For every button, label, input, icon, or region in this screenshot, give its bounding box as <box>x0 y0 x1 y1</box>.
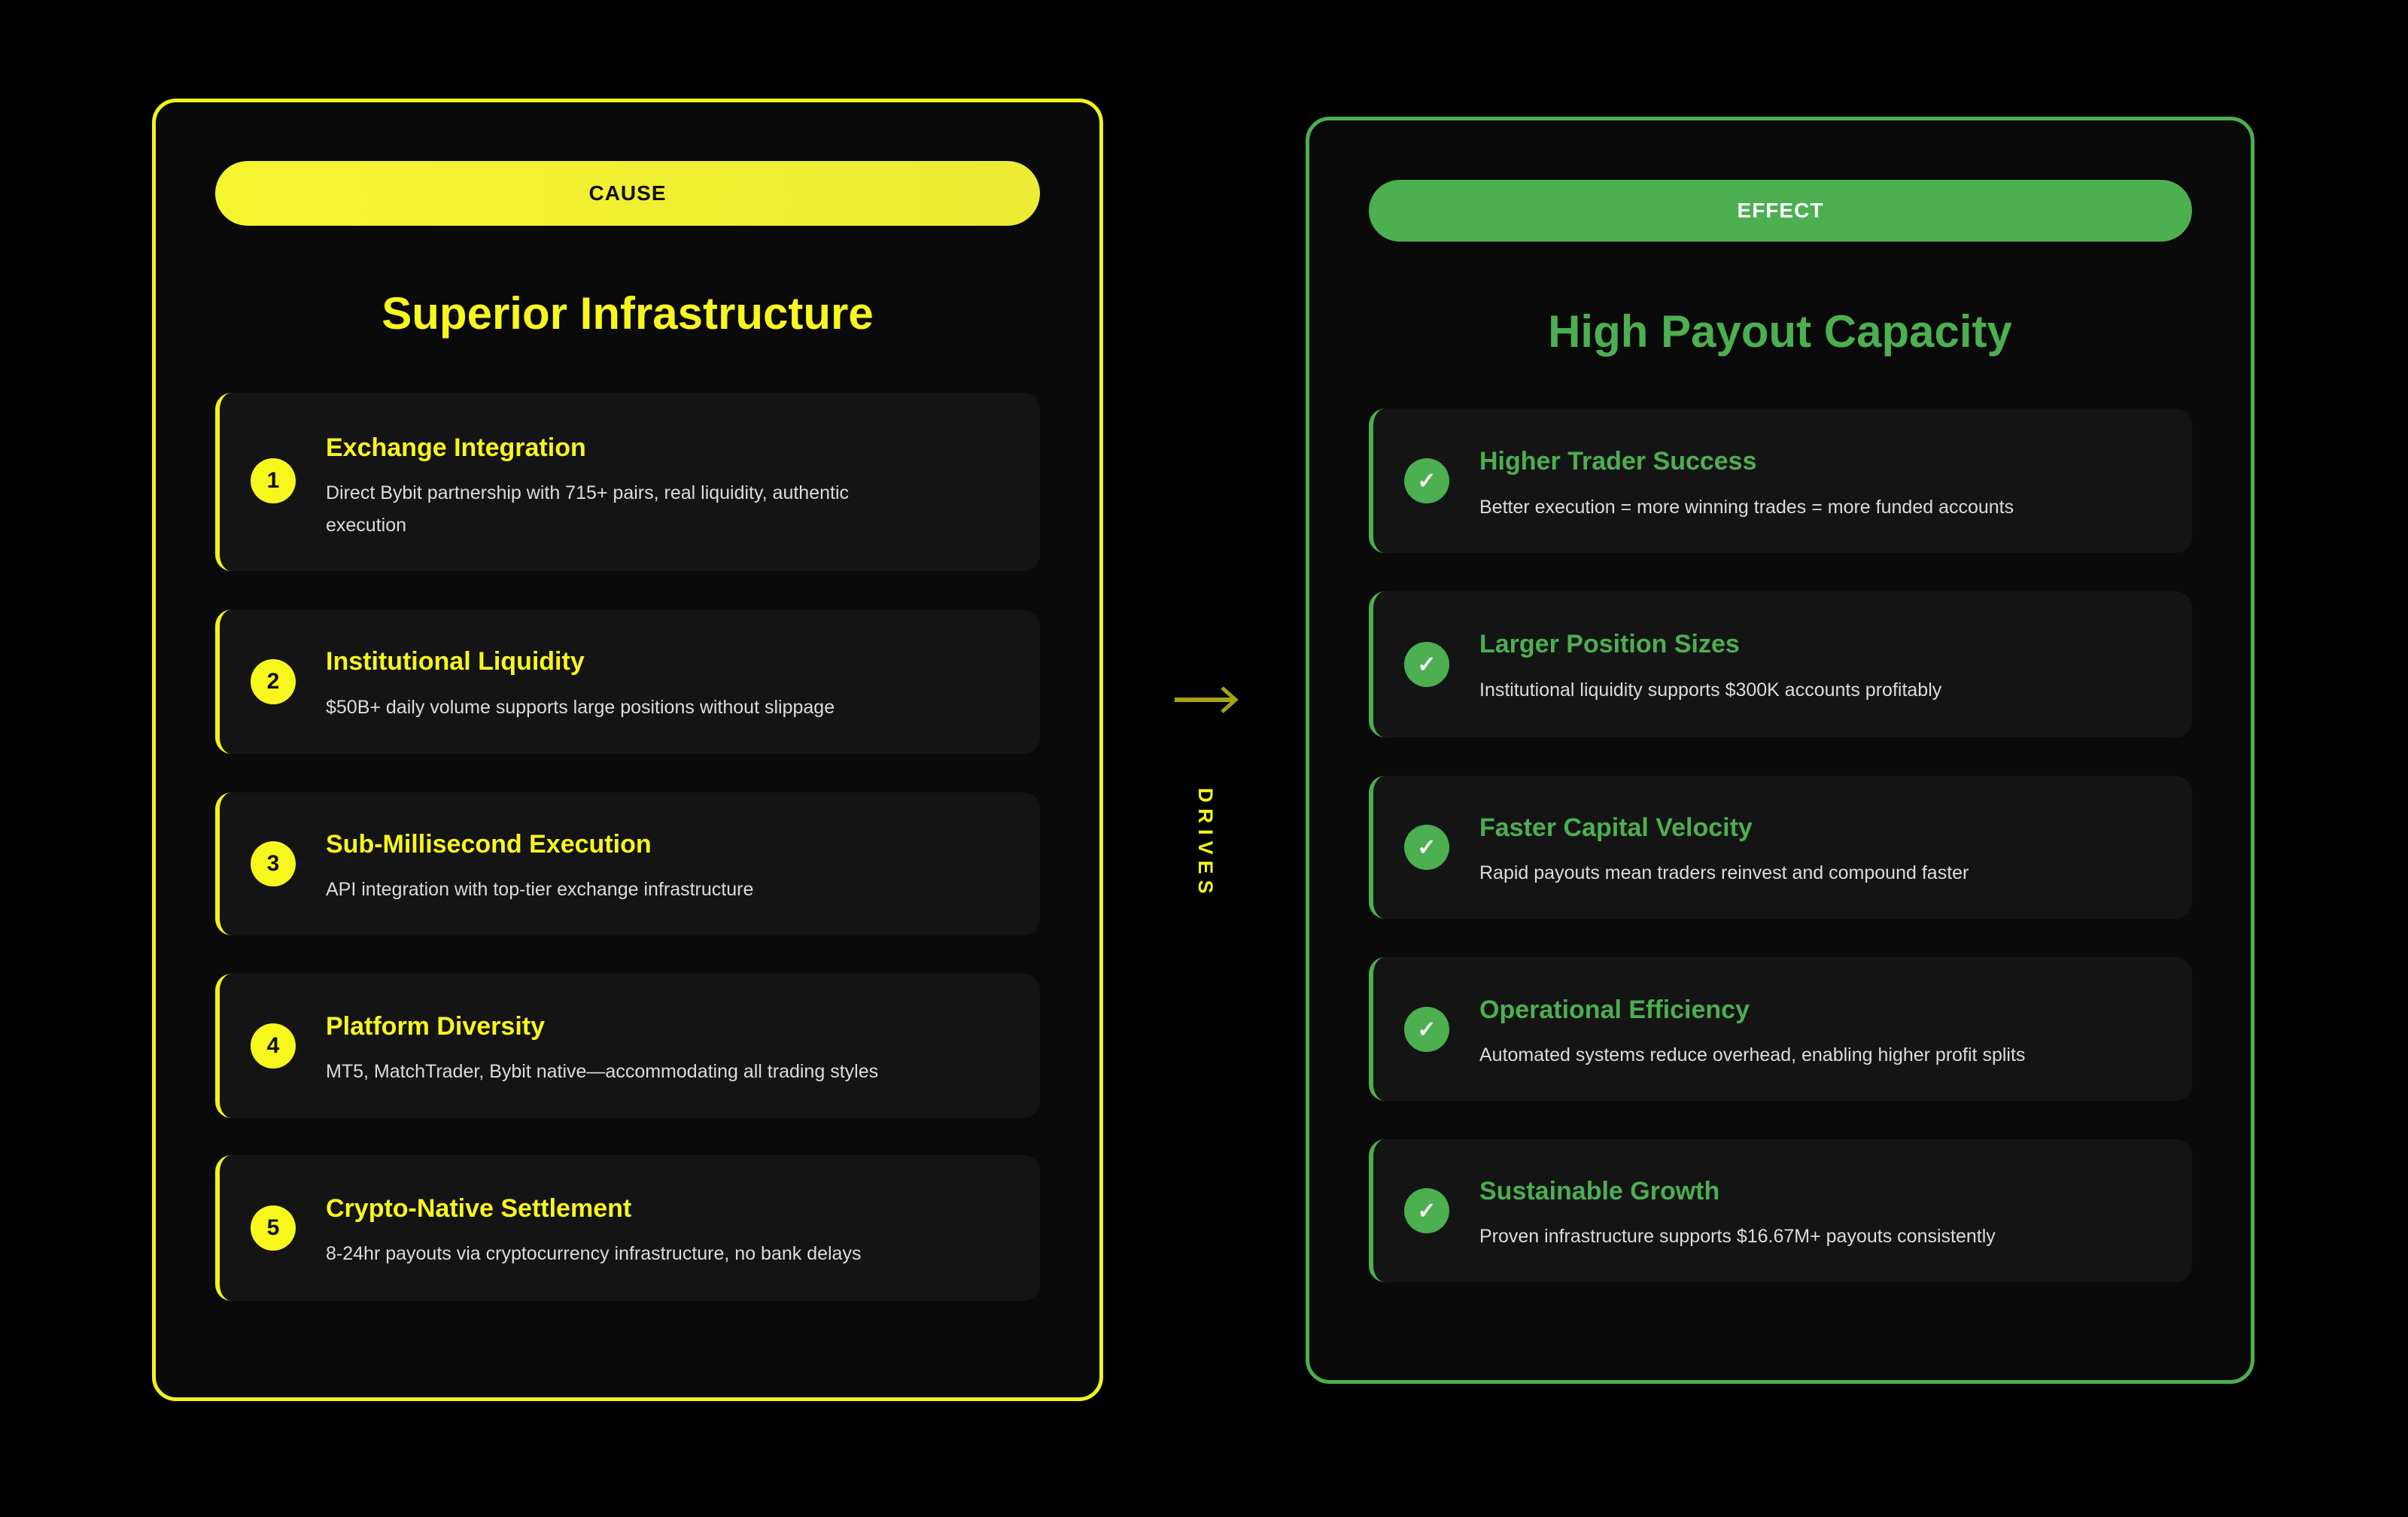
effect pill <box>1369 180 2192 242</box>
card: larger position sizes: Institutional liquidity supports $300K accounts profitably <box>1479 679 1941 701</box>
card 1: Direct Bybit partnership with 715+ pairs, real liquidity, authentic execution <box>326 482 849 536</box>
card: higher trader success <box>1369 409 2192 553</box>
card: larger position sizes <box>1369 591 2192 737</box>
card 2: Institutional Liquidity <box>326 647 585 676</box>
cause title: Superior Infrastructure <box>382 288 874 339</box>
card: larger position sizes: Larger Position Sizes <box>1479 630 1740 658</box>
card 4: MT5, MatchTrader, Bybit native—accommodating all trading styles <box>326 1061 878 1082</box>
card: operational efficiency: Automated systems reduce overhead, enabling higher profit splits <box>1479 1044 2025 1066</box>
card 3: API integration with top-tier exchange infrastructure <box>326 879 753 900</box>
card 3: Sub-Millisecond Execution <box>326 830 652 859</box>
card 2: $50B+ daily volume supports large positions without slippage <box>326 697 835 718</box>
card: sustainable growth <box>1369 1139 2192 1282</box>
card 4: Platform Diversity <box>326 1012 545 1041</box>
card: faster capital velocity: Rapid payouts mean traders reinvest and compound faster <box>1479 862 1969 883</box>
cause pill: CAUSE <box>588 181 667 205</box>
card: higher trader success: Higher Trader Success <box>1479 447 1757 476</box>
card 1: 1 <box>267 468 279 493</box>
card 4: 4 <box>267 1033 279 1058</box>
card 1: Exchange Integration <box>326 433 586 462</box>
panel: cause <box>152 99 1103 1401</box>
effect pill: EFFECT <box>1738 199 1823 222</box>
card 3: 3 <box>267 851 279 876</box>
drives label: DRIVES <box>1194 788 1217 900</box>
card: higher trader success: Better execution = more winning trades = more funded accounts <box>1479 497 2014 518</box>
card 5: 5 <box>267 1215 279 1240</box>
card: operational efficiency: ✓ <box>1417 1017 1437 1041</box>
card: faster capital velocity <box>1369 776 2192 919</box>
card 2: 2 <box>267 669 279 694</box>
effect title: High Payout Capacity <box>1548 306 2012 357</box>
arrow <box>1175 686 1239 713</box>
card 4 <box>215 974 1040 1118</box>
card: operational efficiency: Operational Efficiency <box>1479 996 1750 1024</box>
card: sustainable growth: Proven infrastructure supports $16.67M+ payouts consistently <box>1479 1226 1996 1247</box>
card: larger position sizes: ✓ <box>1417 652 1437 677</box>
cause pill <box>215 161 1040 226</box>
card 1 <box>215 393 1040 571</box>
panel: effect <box>1306 117 2254 1384</box>
card 2 <box>215 610 1040 754</box>
card: sustainable growth: Sustainable Growth <box>1479 1177 1719 1205</box>
card 5 <box>215 1155 1040 1301</box>
card 3 <box>215 792 1040 935</box>
card: higher trader success: ✓ <box>1417 468 1437 494</box>
card: operational efficiency <box>1369 957 2192 1101</box>
card: faster capital velocity: Faster Capital Velocity <box>1479 813 1753 842</box>
card: faster capital velocity: ✓ <box>1417 835 1437 859</box>
card 5: 8-24hr payouts via cryptocurrency infrastructure, no bank delays <box>326 1243 861 1264</box>
card: sustainable growth: ✓ <box>1417 1198 1437 1224</box>
card 5: Crypto-Native Settlement <box>326 1194 631 1223</box>
